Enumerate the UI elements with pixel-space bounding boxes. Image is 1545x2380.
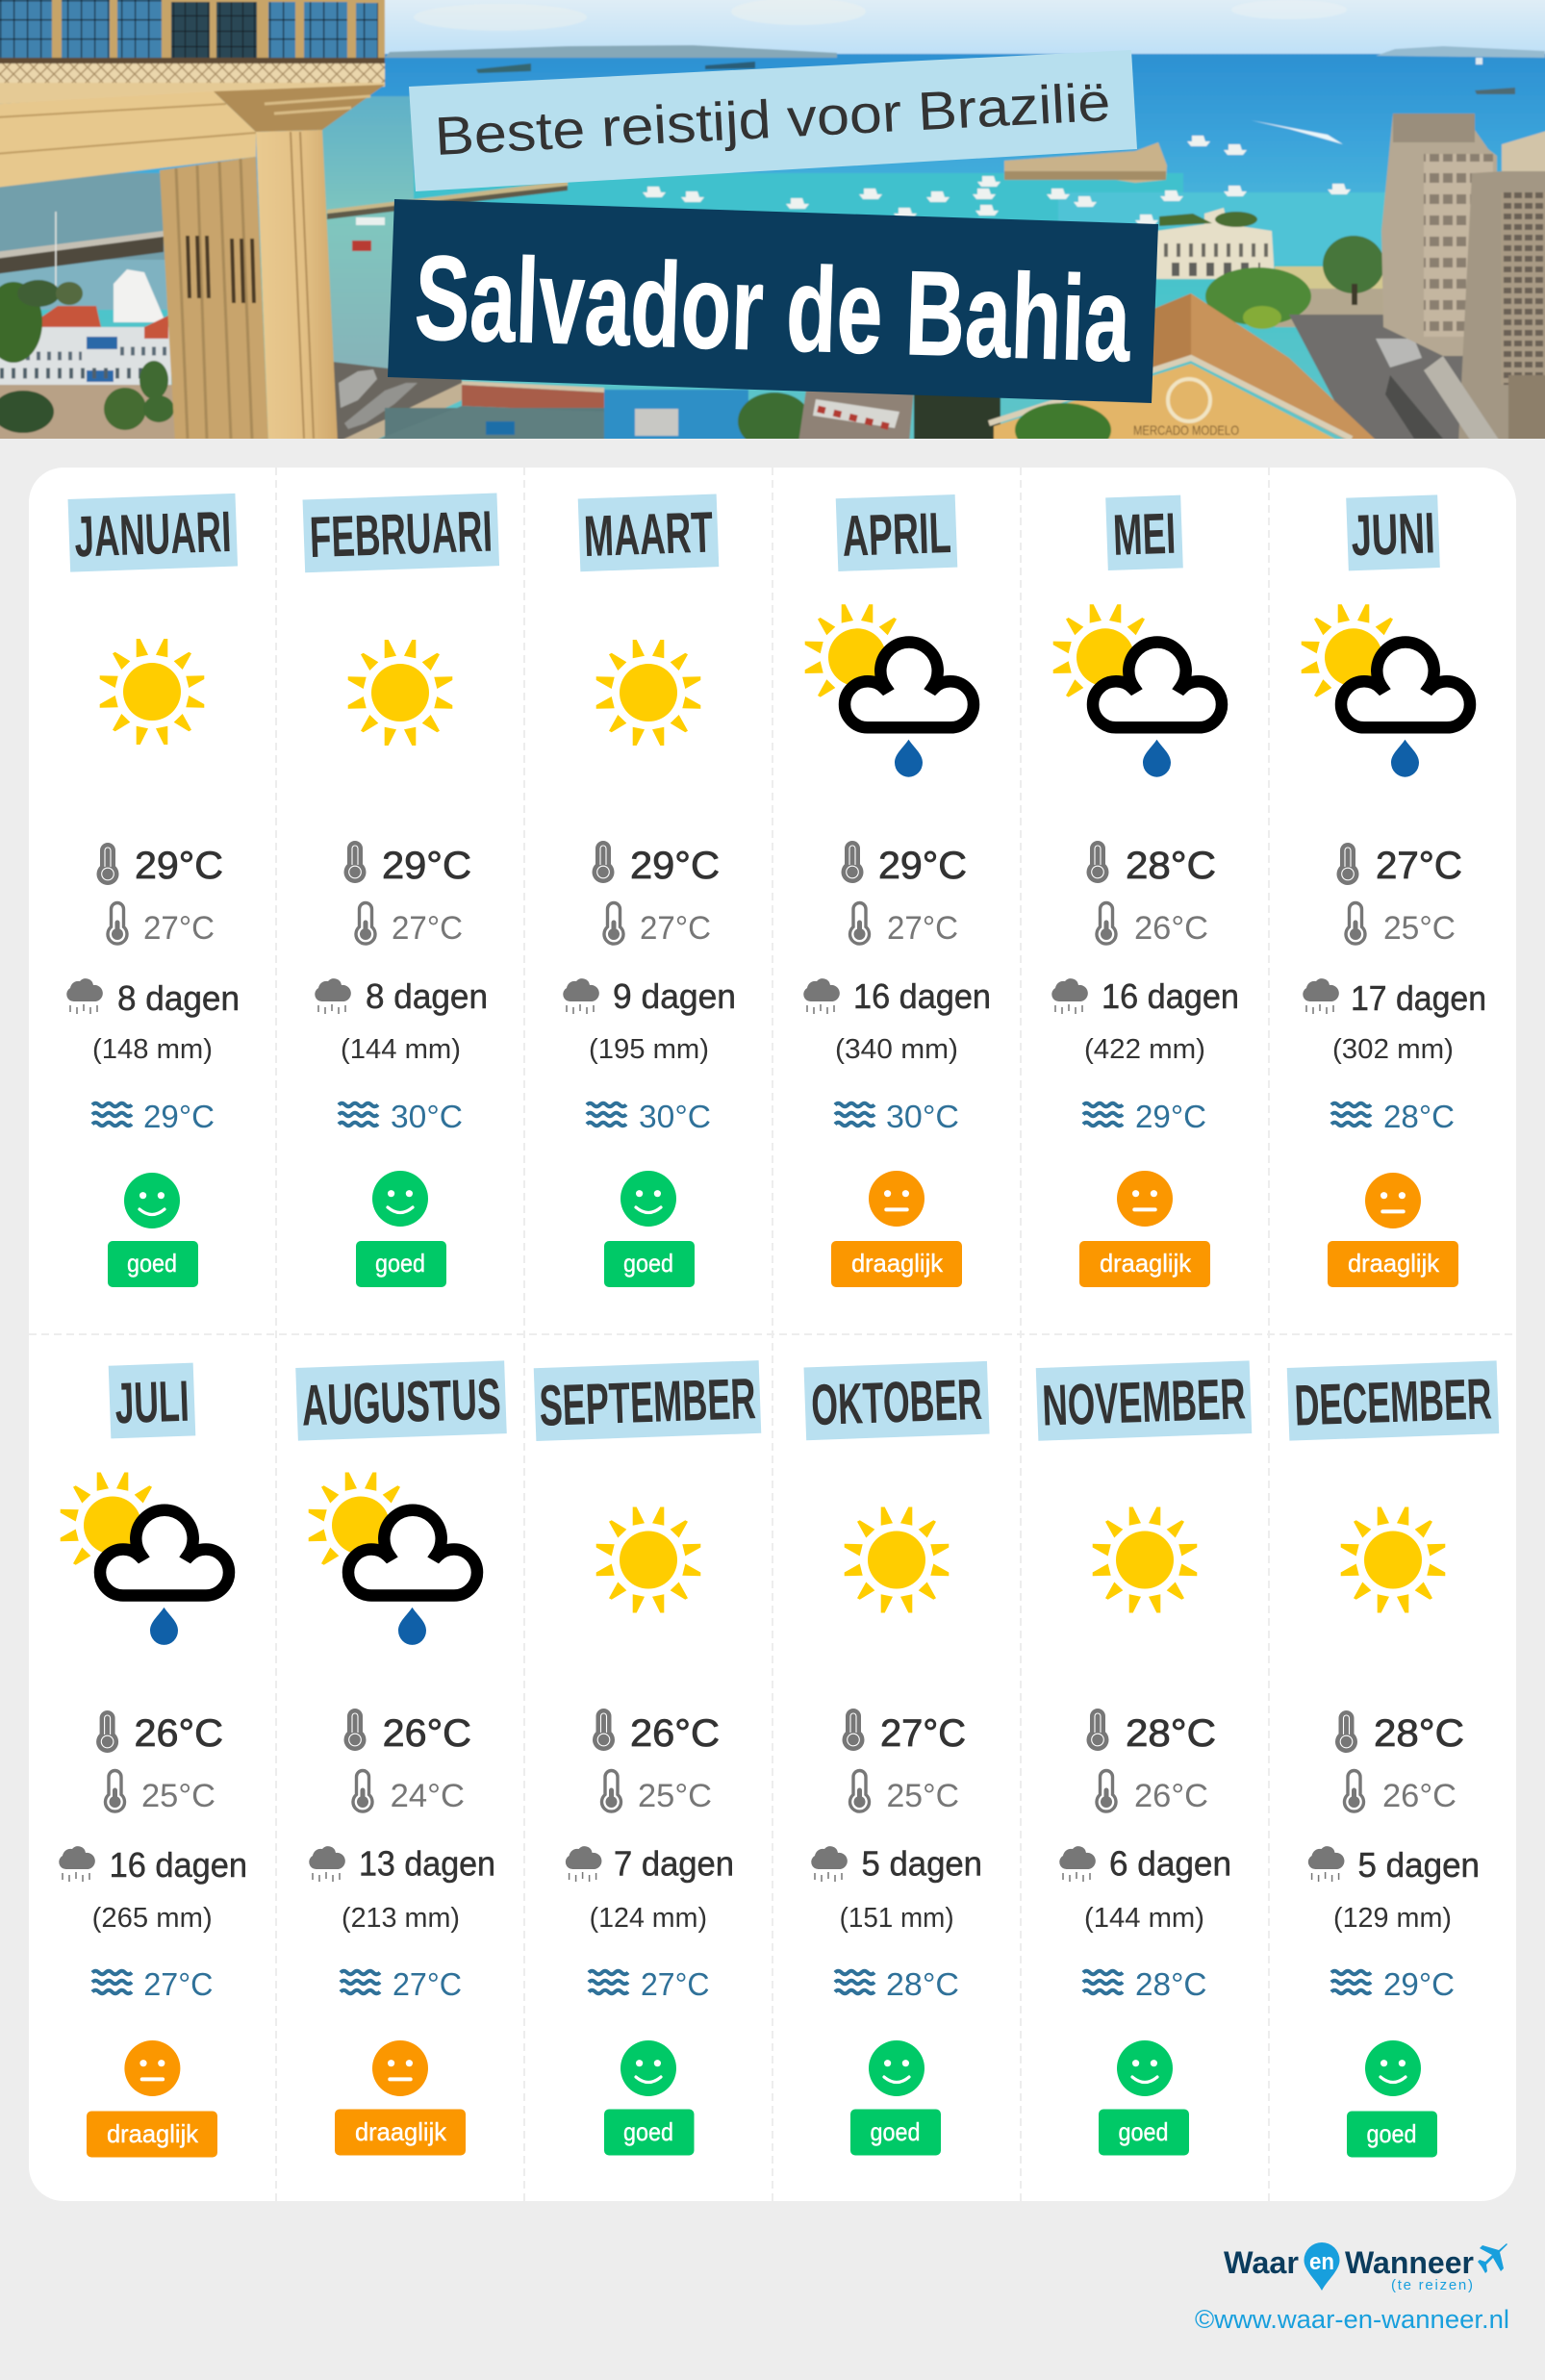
month label: NOVEMBER — [1041, 1366, 1247, 1438]
panel: augustus — [295, 1360, 507, 2155]
rating — [335, 2040, 466, 2155]
max temperature: 29°C — [135, 845, 223, 887]
min temperature — [353, 1770, 465, 1814]
rating: goed — [127, 1249, 177, 1278]
rating — [1347, 2040, 1437, 2157]
min temperature: 26°C — [1382, 1778, 1456, 1814]
min temperature: 25°C — [887, 1778, 959, 1814]
rain days — [66, 978, 240, 1018]
min temperature: 25°C — [638, 1778, 712, 1814]
rating — [1328, 1173, 1458, 1287]
subtitle banner: Beste reistijd voor Brazilië — [433, 71, 1112, 166]
rain days: 17 dagen — [1351, 978, 1486, 1018]
max temperature: 26°C — [135, 1712, 223, 1755]
rain days — [1308, 1845, 1480, 1885]
rain days: 6 dagen — [1109, 1844, 1231, 1884]
rating: draaglijk — [1348, 1249, 1440, 1278]
sea temperature — [835, 1099, 959, 1134]
sea temperature: 29°C — [143, 1099, 215, 1134]
month label: AUGUSTUS — [300, 1366, 502, 1438]
month label: JANUARI — [73, 499, 232, 570]
tall buildings — [1381, 114, 1497, 356]
sea temperature: 30°C — [886, 1099, 959, 1134]
max temperature — [593, 841, 720, 887]
sea temperature — [1083, 1099, 1206, 1134]
rainfall: (151 mm) — [840, 1903, 954, 1934]
sea temperature — [835, 1966, 959, 2002]
month label — [303, 493, 499, 572]
sea temperature — [1331, 1966, 1455, 2002]
rain days: 7 dagen — [614, 1844, 734, 1884]
sea temperature: 30°C — [639, 1099, 711, 1134]
month label — [534, 1360, 761, 1441]
icon: sun with rain cloud — [1302, 604, 1470, 777]
month label — [1105, 495, 1183, 570]
website url: ©www.waar-en-wanneer.nl — [1195, 2305, 1509, 2334]
min temperature: 27°C — [143, 910, 215, 947]
month label: MEI — [1112, 501, 1177, 568]
sea temperature: 28°C — [1135, 1966, 1206, 2002]
rain days: 5 dagen — [1358, 1845, 1480, 1885]
rating — [604, 2040, 695, 2155]
icon: sun — [100, 639, 204, 745]
max temperature: 26°C — [630, 1712, 720, 1755]
rating — [108, 1173, 198, 1287]
max temperature — [593, 1709, 720, 1755]
icon: sun with rain cloud — [805, 604, 974, 777]
rain days: 13 dagen — [359, 1844, 495, 1884]
sea temperature — [92, 1966, 213, 2002]
rain days — [811, 1844, 982, 1884]
sea temperature: 28°C — [886, 1966, 959, 2002]
panel: mei — [1051, 495, 1239, 1287]
icon: sun — [845, 1506, 949, 1612]
boats — [1187, 136, 1210, 146]
icon: sun with rain cloud — [309, 1472, 477, 1645]
max temperature — [344, 841, 471, 887]
max temperature: 27°C — [1376, 845, 1462, 887]
road — [1289, 315, 1472, 443]
rating: goed — [623, 1249, 673, 1278]
panel: september — [534, 1360, 761, 2155]
month label — [1036, 1360, 1252, 1441]
month label: JULI — [114, 1369, 190, 1435]
sea temperature — [1083, 1966, 1206, 2002]
min temperature: 27°C — [887, 910, 958, 947]
month label — [295, 1360, 507, 1441]
sea temperature — [339, 1099, 463, 1134]
fort — [1004, 142, 1167, 183]
sea temperature: 27°C — [393, 1966, 462, 2002]
rain days: 9 dagen — [613, 976, 736, 1016]
ground left — [0, 385, 175, 443]
rain days — [566, 1844, 734, 1884]
sea temperature — [92, 1099, 215, 1134]
panel: januari — [66, 494, 240, 1287]
rating — [850, 2040, 941, 2155]
icon: sun — [1093, 1506, 1197, 1612]
max temperature — [1087, 841, 1216, 887]
min temperature — [602, 1770, 712, 1814]
rainfall: (265 mm) — [92, 1903, 213, 1934]
sea temperature — [341, 1966, 462, 2002]
min temperature — [1345, 1770, 1456, 1814]
sea temperature: 27°C — [143, 1966, 213, 2002]
rainfall: (213 mm) — [342, 1903, 460, 1934]
white colonial building — [0, 327, 171, 387]
max temperature — [1335, 1710, 1464, 1755]
rain days: 16 dagen — [853, 976, 991, 1016]
max temperature — [96, 843, 223, 887]
sea temperature: 30°C — [391, 1099, 463, 1134]
rating: goed — [870, 2117, 920, 2146]
max temperature: 29°C — [382, 845, 471, 887]
rain days: 16 dagen — [110, 1845, 247, 1885]
rating: draaglijk — [1100, 1249, 1192, 1278]
min temperature — [356, 902, 463, 947]
parking and piers — [332, 362, 462, 443]
month label — [68, 494, 238, 572]
panel: november — [1036, 1360, 1252, 2155]
panel: juli — [59, 1363, 247, 2157]
max temperature: 29°C — [878, 845, 967, 887]
quay left — [0, 172, 165, 260]
max temperature: 29°C — [630, 845, 720, 887]
min temperature — [850, 1770, 959, 1814]
panel: oktober — [804, 1361, 990, 2155]
panel: monthly climate table — [29, 468, 1516, 2201]
icon: sun with rain cloud — [61, 1472, 229, 1645]
elevator tower — [50, 0, 387, 60]
rating — [831, 1171, 962, 1287]
month label: APRIL — [841, 500, 952, 569]
max temperature — [841, 841, 967, 887]
sea temperature — [1331, 1099, 1455, 1134]
sea temperature — [589, 1966, 710, 2002]
month label — [578, 494, 719, 571]
sea temperature: 29°C — [1383, 1966, 1455, 2002]
rain days — [1059, 1844, 1231, 1884]
max temperature: 27°C — [880, 1712, 966, 1755]
rating — [87, 2040, 217, 2157]
subtitle banner — [409, 50, 1137, 191]
header photo: Salvador bay and Lacerda elevator: MERCADO MODELO — [1133, 422, 1239, 438]
rain days: 5 dagen — [862, 1844, 982, 1884]
sea temperature: 28°C — [1383, 1099, 1455, 1134]
min temperature — [1097, 1770, 1208, 1814]
max temperature — [1087, 1709, 1216, 1755]
min temperature — [1346, 902, 1456, 947]
month label — [109, 1363, 195, 1438]
rainfall: (340 mm) — [835, 1034, 958, 1065]
min temperature: 27°C — [392, 910, 463, 947]
rainfall: (422 mm) — [1084, 1034, 1205, 1065]
month label: JUNI — [1350, 500, 1436, 568]
min temperature: 25°C — [141, 1778, 215, 1814]
min temperature — [850, 902, 958, 947]
month label — [1346, 494, 1440, 570]
logo: Waar en Wanneer — [1224, 2242, 1507, 2293]
rating: draaglijk — [851, 1249, 944, 1278]
rating: draaglijk — [355, 2117, 447, 2146]
max temperature: 28°C — [1126, 1712, 1216, 1755]
min temperature: 26°C — [1134, 910, 1208, 947]
logo: Waar en Wanneer: en — [1309, 2249, 1334, 2275]
rainfall: (148 mm) — [92, 1034, 213, 1065]
icon: sun — [348, 640, 452, 746]
panel: februari — [303, 493, 499, 1287]
sea temperature: 29°C — [1135, 1099, 1206, 1134]
max temperature — [1337, 843, 1462, 887]
rating — [604, 1171, 695, 1287]
min temperature — [108, 902, 215, 947]
rainfall: (144 mm) — [1084, 1903, 1204, 1934]
icon: sun — [596, 640, 700, 746]
sea temperature: 27°C — [641, 1966, 710, 2002]
max temperature: 26°C — [383, 1712, 471, 1755]
month label: FEBRUARI — [309, 499, 494, 570]
sea temperature — [587, 1099, 711, 1134]
title banner — [388, 199, 1158, 403]
title banner: Salvador de Bahia — [413, 231, 1133, 387]
panel: december — [1287, 1360, 1499, 2157]
rating: draaglijk — [107, 2119, 199, 2148]
rain days: 16 dagen — [1102, 976, 1239, 1016]
max temperature — [344, 1709, 471, 1755]
rain days: 8 dagen — [117, 978, 240, 1018]
market hall roof — [1189, 292, 1376, 439]
rainfall: (129 mm) — [1333, 1903, 1452, 1934]
rain days — [315, 976, 488, 1016]
rainfall: (144 mm) — [341, 1034, 461, 1065]
min temperature — [604, 902, 711, 947]
panel: maart — [563, 494, 736, 1287]
month label — [836, 494, 957, 571]
min temperature — [1097, 902, 1208, 947]
panel: april — [803, 494, 991, 1287]
month label: SEPTEMBER — [538, 1366, 757, 1438]
logo: Waar en Wanneer: Waar — [1224, 2245, 1299, 2280]
rain days: 8 dagen — [366, 976, 488, 1016]
icon: sun with rain cloud — [1053, 604, 1222, 777]
min temperature: 27°C — [640, 910, 711, 947]
max temperature — [96, 1710, 223, 1755]
rainfall: (195 mm) — [589, 1034, 709, 1065]
rating — [1079, 1171, 1210, 1287]
rating: goed — [1118, 2117, 1168, 2146]
month label: OKTOBER — [810, 1367, 983, 1437]
rating — [1099, 2040, 1189, 2155]
min temperature — [106, 1770, 215, 1814]
min temperature: 25°C — [1383, 910, 1456, 947]
month label: MAART — [583, 499, 714, 569]
max temperature — [843, 1709, 966, 1755]
min temperature: 26°C — [1134, 1778, 1208, 1814]
rating: goed — [623, 2117, 673, 2146]
month label — [804, 1361, 990, 1440]
header photo: Salvador bay and Lacerda elevator — [0, 0, 1545, 457]
max temperature: 28°C — [1374, 1712, 1464, 1755]
rainfall: (302 mm) — [1332, 1034, 1454, 1065]
rating: goed — [375, 1249, 425, 1278]
logo: Waar en Wanneer: Wanneer — [1345, 2245, 1474, 2280]
min temperature: 24°C — [391, 1778, 465, 1814]
rating — [356, 1171, 446, 1287]
logo: Waar en Wanneer: (te reizen) — [1391, 2277, 1473, 2293]
panel: juni — [1302, 494, 1486, 1287]
rating: goed — [1366, 2119, 1416, 2148]
max temperature: 28°C — [1126, 845, 1216, 887]
icon: sun — [596, 1506, 700, 1612]
white harbour building — [1156, 208, 1275, 279]
icon: sun — [1341, 1506, 1445, 1612]
rainfall: (124 mm) — [590, 1903, 707, 1934]
